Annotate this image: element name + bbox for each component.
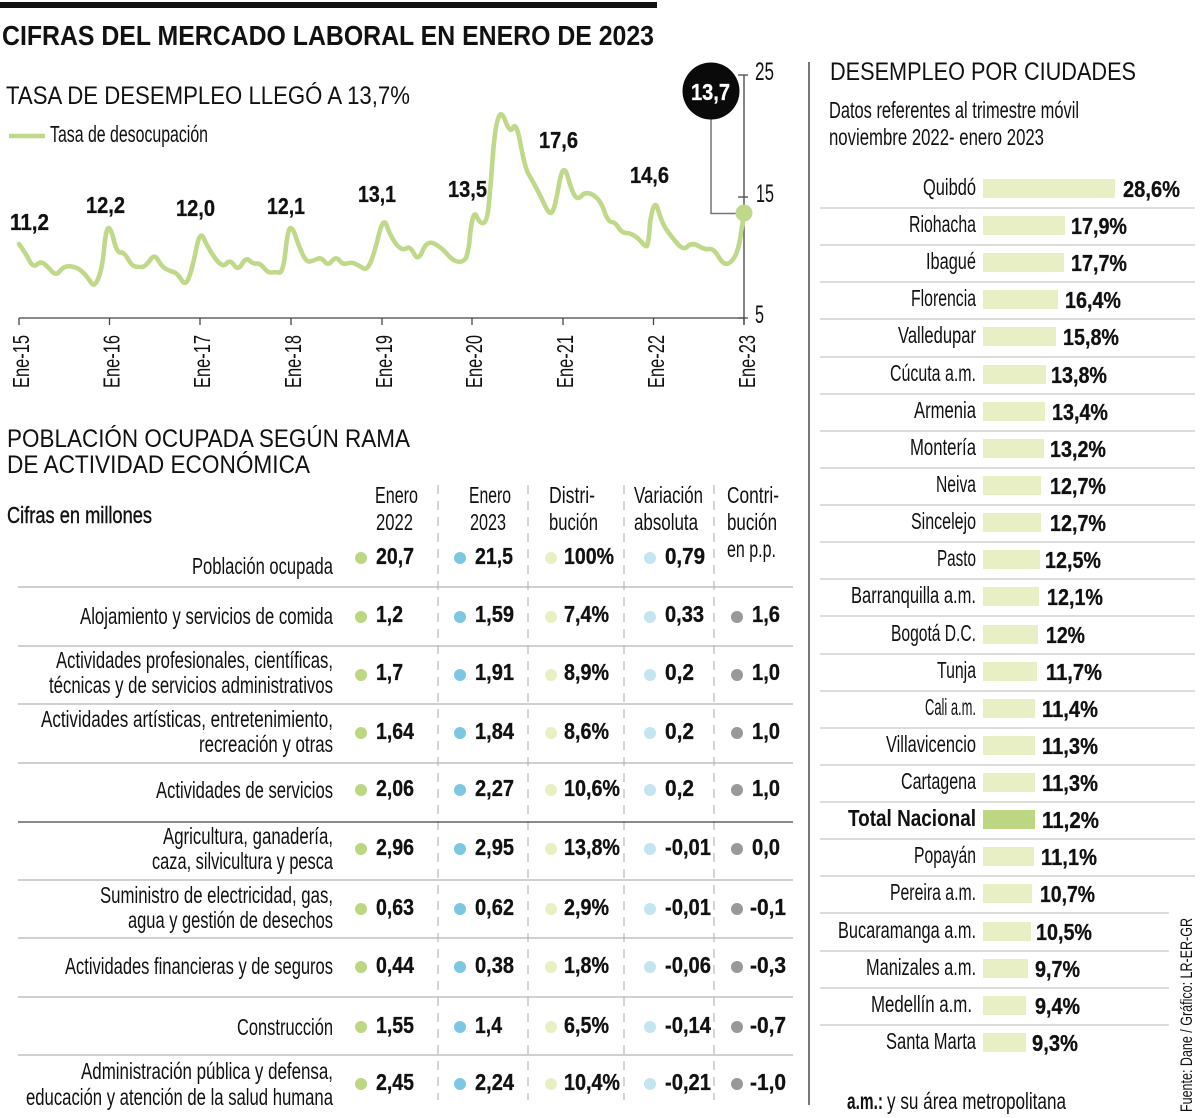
row: agricultura <box>152 823 780 874</box>
row: actividades artísticas: 0,2 <box>665 718 694 744</box>
heading: población ocupada: POBLACIÓN OCUPADA SEGÚN RAMA <box>7 424 410 453</box>
row: actividades financieras <box>65 952 786 979</box>
axis labels x: Ene-19 <box>371 335 397 388</box>
row: construcción: -0,14 <box>665 1012 711 1038</box>
row: agricultura: caza, silvicultura y pesca <box>152 848 334 874</box>
row: Sincelejo <box>911 508 1106 536</box>
row: Pereira <box>890 879 1095 907</box>
row: Cali: Cali a.m. <box>925 694 976 720</box>
column headers: Enero <box>375 482 418 508</box>
row: Cúcuta <box>890 360 1107 388</box>
row: actividades financieras: 1,8% <box>564 952 609 978</box>
row: Armenia: 13,4% <box>1052 399 1108 425</box>
row: Florencia: 16,4% <box>1065 287 1121 313</box>
row: actividades de servicios: 10,6% <box>564 775 620 801</box>
row: suministro <box>100 882 786 933</box>
subtitle <box>829 97 1079 150</box>
row: administración pública: 2,45 <box>376 1069 414 1095</box>
row: administración pública: educación y atención de la salud humana <box>26 1084 334 1110</box>
row: actividades profesionales: 1,0 <box>752 659 780 685</box>
row: actividades artísticas: Actividades artísticas, entretenimiento, <box>41 706 333 732</box>
row: construcción: 1,55 <box>376 1012 414 1038</box>
row: Tunja: Tunja <box>937 657 977 683</box>
row: suministro: 0,63 <box>376 894 414 920</box>
row: Bogotá <box>891 620 1085 648</box>
row: Villavicencio: Villavicencio <box>886 731 976 757</box>
row: Sincelejo: Sincelejo <box>911 508 976 534</box>
row: Manizales <box>866 954 1080 982</box>
row: actividades profesionales: 0,2 <box>665 659 694 685</box>
row: Cúcuta: Cúcuta a.m. <box>890 360 976 386</box>
row: construcción: 1,4 <box>475 1012 502 1038</box>
row: Quibdó <box>923 174 1180 202</box>
row: actividades financieras: 0,38 <box>475 952 514 978</box>
row: actividades profesionales <box>49 647 780 698</box>
row: Cali <box>925 694 1098 722</box>
callout: 13,7: 13,7 <box>691 79 730 105</box>
row: Barranquilla: Barranquilla a.m. <box>851 582 976 608</box>
footnote: a.m.: a.m.: <box>847 1088 883 1114</box>
row: actividades profesionales: 1,7 <box>376 659 403 685</box>
row: Total Nacional: Total Nacional <box>848 805 976 831</box>
row: construcción: 6,5% <box>564 1012 609 1038</box>
row: Pasto <box>937 545 1101 573</box>
row: Cartagena: 11,3% <box>1042 770 1098 796</box>
row: Valledupar <box>898 322 1119 350</box>
row: Total Nacional: 11,2% <box>1042 807 1099 833</box>
row: actividades profesionales: 1,91 <box>475 659 514 685</box>
axis labels x: Ene-21 <box>552 335 578 388</box>
column headers: 2023 <box>470 509 506 535</box>
row: Neiva <box>936 471 1106 499</box>
note: cifras en millones: Cifras en millones <box>7 502 152 528</box>
axis labels y: 25 <box>755 58 774 86</box>
row: Bogotá: 12% <box>1046 622 1085 648</box>
row: actividades artísticas: 8,6% <box>564 718 609 744</box>
row: Medellín: Medellín a.m. <box>871 991 972 1017</box>
row: actividades artísticas: recreación y otras <box>199 731 333 757</box>
row: Riohacha: Riohacha <box>909 211 977 237</box>
row: suministro: 0,62 <box>475 894 514 920</box>
row: construcción: -0,7 <box>750 1012 786 1038</box>
column headers: Variación <box>634 482 703 508</box>
row: Cartagena: Cartagena <box>901 768 977 794</box>
callout: 13,7 <box>682 62 752 222</box>
data labels: 13,5 <box>448 176 487 202</box>
row: actividades de servicios <box>156 775 780 803</box>
row: suministro: Suministro de electricidad, gas, <box>100 882 333 908</box>
subtitle: noviembre 2022- enero 2023 <box>829 124 1044 150</box>
row: actividades de servicios: 1,0 <box>752 775 780 801</box>
row: administración pública: 2,24 <box>475 1069 514 1095</box>
row: población ocupada: 21,5 <box>475 543 513 569</box>
column headers: Enero <box>469 482 511 508</box>
row: Pasto: Pasto <box>937 545 976 571</box>
row: Tunja: 11,7% <box>1046 659 1102 685</box>
row: Montería <box>910 434 1106 462</box>
row: Florencia: Florencia <box>911 285 977 311</box>
footnote: a.m.: y su área metropolitana <box>887 1088 1067 1114</box>
axis labels y <box>755 58 774 329</box>
heading: población ocupada <box>7 424 410 479</box>
panel: population by activity table <box>7 424 793 1110</box>
row: población ocupada: 0,79 <box>665 543 705 569</box>
chart axes <box>19 75 748 325</box>
data labels: 17,6 <box>539 127 578 153</box>
row: suministro: 2,9% <box>564 894 609 920</box>
row: actividades financieras: 0,44 <box>376 952 414 978</box>
row: construcción: Construcción <box>237 1014 333 1040</box>
row: actividades artísticas: 1,84 <box>475 718 514 744</box>
column headers: en p.p. <box>727 536 776 562</box>
row: suministro: -0,1 <box>750 894 786 920</box>
row: construcción <box>237 1012 786 1040</box>
axis labels x: Ene-18 <box>280 335 306 388</box>
row: Neiva: 12,7% <box>1050 473 1106 499</box>
row: actividades de servicios: Actividades de servicios <box>156 777 333 803</box>
row: Santa Marta: Santa Marta <box>886 1028 977 1054</box>
row: población ocupada: 100% <box>564 543 614 569</box>
axis labels y: 15 <box>756 180 774 208</box>
row: población ocupada: Población ocupada <box>192 553 334 579</box>
column headers: Contri- <box>727 482 779 508</box>
row: Cartagena <box>901 768 1098 796</box>
row: Armenia <box>914 397 1108 425</box>
row: actividades de servicios: 2,06 <box>376 775 414 801</box>
title <box>0 2 657 51</box>
column headers: absoluta <box>634 509 699 535</box>
axis labels x: Ene-17 <box>189 335 215 388</box>
row: actividades financieras: Actividades financieras y de seguros <box>65 953 333 979</box>
axis labels x: Ene-23 <box>734 335 760 388</box>
row: administración pública: -1,0 <box>750 1069 786 1095</box>
data labels: 12,1 <box>267 193 305 219</box>
heading: tasa de desempleo: TASA DE DESEMPLEO LLEGÓ A 13,7% <box>6 81 410 110</box>
row: agricultura: -0,01 <box>665 834 711 860</box>
row: actividades financieras: -0,06 <box>665 952 711 978</box>
column headers: 2022 <box>376 509 413 535</box>
panel: unemployment line chart <box>6 58 774 388</box>
source credit: Fuente: Dane / Gráfico: LR-ER-GR <box>1178 918 1196 1112</box>
row: suministro: -0,01 <box>665 894 711 920</box>
panel: unemployment by city <box>820 58 1195 1114</box>
row: administración pública <box>26 1058 786 1110</box>
row: Pereira: Pereira a.m. <box>890 879 976 905</box>
data labels: 14,6 <box>630 162 669 188</box>
row: Riohacha <box>909 211 1127 239</box>
axis labels x: Ene-16 <box>98 335 124 388</box>
row: Bogotá: Bogotá D.C. <box>891 620 976 646</box>
column headers: bución <box>727 509 777 535</box>
data labels: 12,2 <box>86 192 125 218</box>
row: administración pública: 10,4% <box>564 1069 620 1095</box>
axis labels x: Ene-15 <box>8 335 34 388</box>
row: Manizales: Manizales a.m. <box>866 954 976 980</box>
row: Cúcuta: 13,8% <box>1051 362 1107 388</box>
row: alojamiento: Alojamiento y servicios de comida <box>80 603 334 629</box>
row: Bucaramanga: Bucaramanga a.m. <box>838 917 976 943</box>
row: agricultura: 2,95 <box>475 834 514 860</box>
data line <box>19 114 744 285</box>
data labels: 11,2 <box>10 209 49 235</box>
row: Santa Marta: 9,3% <box>1032 1030 1078 1056</box>
axis labels x <box>8 335 760 388</box>
row: Ibagué <box>926 248 1127 276</box>
row: Popayán <box>914 842 1097 870</box>
row: Popayán: Popayán <box>914 842 976 868</box>
row: población ocupada <box>192 543 705 579</box>
row: actividades profesionales: Actividades profesionales, científicas, <box>56 647 333 673</box>
row: Pereira: 10,7% <box>1040 881 1095 907</box>
row: alojamiento: 0,33 <box>665 601 704 627</box>
legend: Tasa de desocupación <box>50 121 208 147</box>
row: actividades de servicios: 2,27 <box>475 775 514 801</box>
row: actividades artísticas: 1,0 <box>752 718 780 744</box>
row: Pasto: 12,5% <box>1045 547 1101 573</box>
axis labels x: Ene-22 <box>643 335 669 388</box>
row: Santa Marta <box>886 1028 1078 1056</box>
footnote: a.m. <box>847 1088 1067 1114</box>
axis labels x: Ene-20 <box>461 335 487 388</box>
row: agricultura: Agricultura, ganadería, <box>163 823 333 849</box>
row: Medellín <box>871 991 1080 1019</box>
row: Montería: Montería <box>910 434 977 460</box>
row: administración pública: -0,21 <box>665 1069 711 1095</box>
row: alojamiento: 1,6 <box>752 601 780 627</box>
row: actividades profesionales: técnicas y de servicios administrativos <box>49 672 333 698</box>
row: agricultura: 0,0 <box>752 834 780 860</box>
row: actividades profesionales: 8,9% <box>564 659 609 685</box>
row: Popayán: 11,1% <box>1041 844 1097 870</box>
row: Medellín: 9,4% <box>1035 993 1080 1019</box>
column headers: Distri- <box>549 482 595 508</box>
data labels <box>10 127 669 235</box>
row: Quibdó: 28,6% <box>1123 176 1180 202</box>
data labels: 13,1 <box>358 181 396 207</box>
row: Villavicencio <box>886 731 1098 759</box>
row: actividades artísticas: 1,64 <box>376 718 414 744</box>
row: población ocupada: 20,7 <box>376 543 414 569</box>
row: Neiva: Neiva <box>936 471 977 497</box>
row: Montería: 13,2% <box>1050 436 1106 462</box>
row: Quibdó: Quibdó <box>923 174 976 200</box>
row: Florencia <box>911 285 1121 313</box>
row: Armenia: Armenia <box>914 397 977 423</box>
row: Villavicencio: 11,3% <box>1042 733 1098 759</box>
row: alojamiento: 7,4% <box>564 601 609 627</box>
row: Barranquilla: 12,1% <box>1047 584 1103 610</box>
row: Valledupar: Valledupar <box>898 322 976 348</box>
row: administración pública: Administración pública y defensa, <box>81 1058 333 1084</box>
row: Riohacha: 17,9% <box>1071 213 1127 239</box>
row: alojamiento <box>80 601 780 629</box>
row: Ibagué: 17,7% <box>1071 250 1127 276</box>
row: actividades de servicios: 0,2 <box>665 775 694 801</box>
row: Valledupar: 15,8% <box>1063 324 1119 350</box>
row: suministro: agua y gestión de desechos <box>128 907 333 933</box>
title: CIFRAS DEL MERCADO LABORAL EN ENERO DE 2023 <box>2 20 654 51</box>
heading: población ocupada: DE ACTIVIDAD ECONÓMICA <box>7 450 310 479</box>
column headers: bución <box>549 509 598 535</box>
row: Sincelejo: 12,7% <box>1050 510 1106 536</box>
row: alojamiento: 1,2 <box>376 601 403 627</box>
row: agricultura: 2,96 <box>376 834 414 860</box>
row: Cali: 11,4% <box>1042 696 1098 722</box>
heading: desempleo por ciudades: DESEMPLEO POR CIUDADES <box>830 58 1136 86</box>
row: Bucaramanga: 10,5% <box>1036 919 1092 945</box>
column headers <box>375 482 779 562</box>
row: Manizales: 9,7% <box>1035 956 1080 982</box>
axis labels y: 5 <box>755 301 764 329</box>
row: agricultura: 13,8% <box>564 834 620 860</box>
row: Barranquilla <box>851 582 1103 610</box>
row: Tunja <box>937 657 1102 685</box>
subtitle: Datos referentes al trimestre móvil <box>829 97 1079 123</box>
row: Total Nacional <box>848 805 1099 833</box>
row: Ibagué: Ibagué <box>926 248 976 274</box>
row: actividades financieras: -0,3 <box>750 952 786 978</box>
data labels: 12,0 <box>176 195 215 221</box>
row: alojamiento: 1,59 <box>475 601 514 627</box>
row: actividades artísticas <box>41 706 780 757</box>
